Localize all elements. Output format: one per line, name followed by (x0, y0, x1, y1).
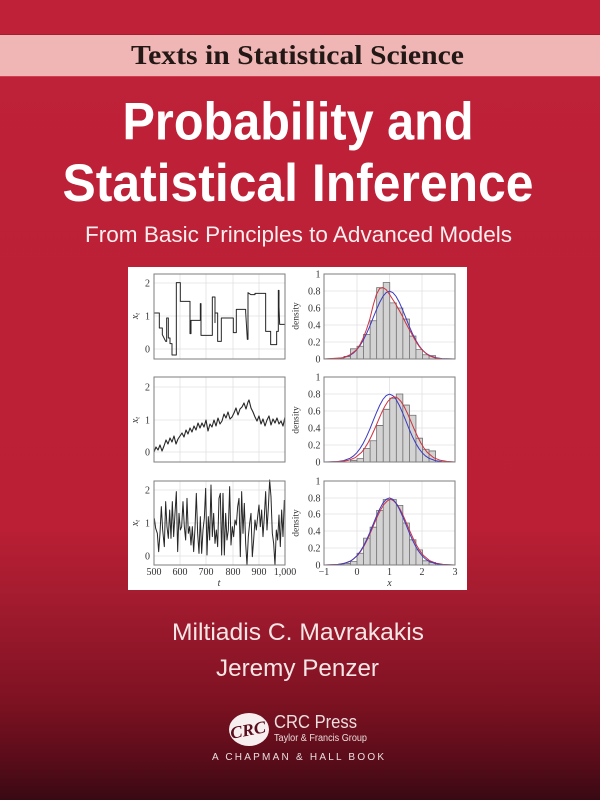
line chart 3: 800 (226, 567, 240, 578)
line chart 3: t (134, 520, 142, 522)
line chart 1: 2 (145, 278, 150, 290)
histogram 3: 0 (316, 560, 320, 572)
histogram 1: 0.2 (308, 338, 320, 348)
histogram 3: 0.6 (308, 510, 320, 520)
histogram 3: 2 (420, 567, 424, 578)
line chart 2: 0 (145, 448, 150, 458)
icon: CRC oval (228, 713, 269, 746)
subtitle: From Basic Principles to Advanced Models (85, 222, 512, 247)
histogram 1: 0 (316, 354, 320, 366)
line chart 3: t (218, 578, 221, 589)
publisher group: Taylor & Francis Group (274, 733, 367, 744)
line chart 1: 1 (145, 312, 150, 322)
histogram 3: 0 (354, 567, 360, 578)
figure panel (128, 267, 467, 590)
histogram 2: 0 (316, 458, 320, 468)
histogram 1: 1 (316, 270, 320, 280)
line chart 2: x (130, 419, 141, 423)
line chart 3: 2 (145, 486, 150, 496)
title: Statistical Inference (62, 154, 534, 213)
histogram 1: density (292, 302, 302, 330)
line chart 3: 1,000 (274, 567, 296, 578)
line chart 1: x (130, 315, 141, 319)
line chart 3: 0 (145, 552, 150, 562)
histogram 3: density (292, 509, 302, 537)
histogram 3: 1 (316, 476, 320, 488)
authors: Miltiadis C. Mavrakakis (172, 619, 424, 646)
line chart 3: x (130, 522, 141, 526)
title: Probability and (122, 92, 474, 152)
histogram 3: 0.2 (308, 544, 320, 554)
histogram 2: 1 (316, 372, 320, 384)
imprint: A CHAPMAN & HALL BOOK (212, 752, 384, 763)
histogram 3: 0.4 (308, 526, 320, 538)
histogram 2: density (292, 406, 302, 434)
authors: Jeremy Penzer (216, 655, 379, 682)
line chart 2: 1 (145, 416, 150, 426)
line chart 1: t (134, 313, 142, 315)
histogram 3: 3 (452, 567, 458, 578)
histogram 1: 0.8 (308, 286, 320, 298)
line chart 3: 900 (252, 567, 266, 578)
publisher logo (212, 711, 384, 763)
title (62, 92, 534, 213)
line chart 1: 0 (145, 344, 150, 356)
histogram 2: 0.8 (308, 390, 320, 400)
line chart 3: 700 (198, 567, 214, 578)
histogram 2: 0.6 (308, 406, 320, 418)
histogram 1 (292, 270, 455, 366)
histogram 2: 0.4 (308, 424, 320, 434)
histogram 2: 0.2 (308, 440, 320, 452)
icon: CRC oval: CRC (228, 717, 268, 743)
histogram 3: x (386, 578, 392, 589)
series name: Texts in Statistical Science (131, 40, 464, 70)
line chart 3: 1 (145, 518, 150, 530)
histogram 3: 1 (387, 567, 392, 578)
authors (172, 619, 424, 682)
line chart 3 (130, 480, 296, 589)
line chart 3: 600 (172, 567, 188, 578)
line chart 2: 2 (145, 382, 150, 394)
histogram 3: −1 (319, 567, 329, 578)
line chart 2: t (134, 417, 142, 419)
histogram 3: 0.8 (308, 494, 320, 504)
histogram 1: 0.4 (308, 320, 320, 332)
histogram 2 (292, 372, 455, 468)
line chart 1 (130, 274, 285, 359)
line chart 2 (130, 377, 285, 462)
line chart 3: 500 (146, 567, 162, 578)
series band (0, 34, 600, 77)
histogram 3 (292, 476, 458, 589)
histogram 1: 0.6 (308, 304, 320, 314)
publisher name: CRC Press (274, 711, 357, 732)
